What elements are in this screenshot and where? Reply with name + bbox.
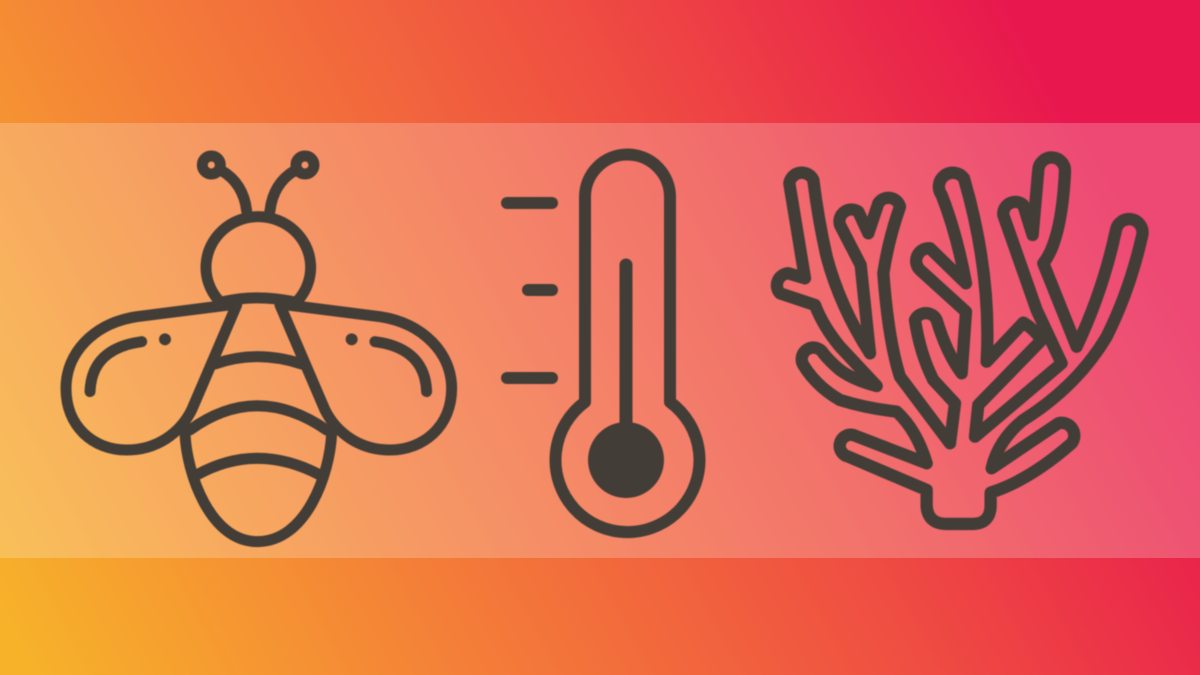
temperature tick marks (507, 203, 552, 378)
bee wing highlights (90, 333, 427, 392)
thermometer mercury stem (620, 265, 632, 440)
bee left wing (66, 304, 237, 450)
bee thorax cap (223, 298, 293, 302)
bee antennae (202, 156, 314, 211)
bee right wing (280, 304, 452, 450)
icon: thermometer (507, 154, 699, 532)
bee stripes (190, 357, 327, 475)
bee body (185, 433, 332, 542)
thermometer mercury bulb (588, 422, 664, 498)
bee head (206, 217, 311, 300)
light central band (0, 123, 1200, 558)
thermometer outline (556, 154, 699, 532)
icon: bee (66, 156, 452, 542)
icon: coral (777, 157, 1143, 524)
